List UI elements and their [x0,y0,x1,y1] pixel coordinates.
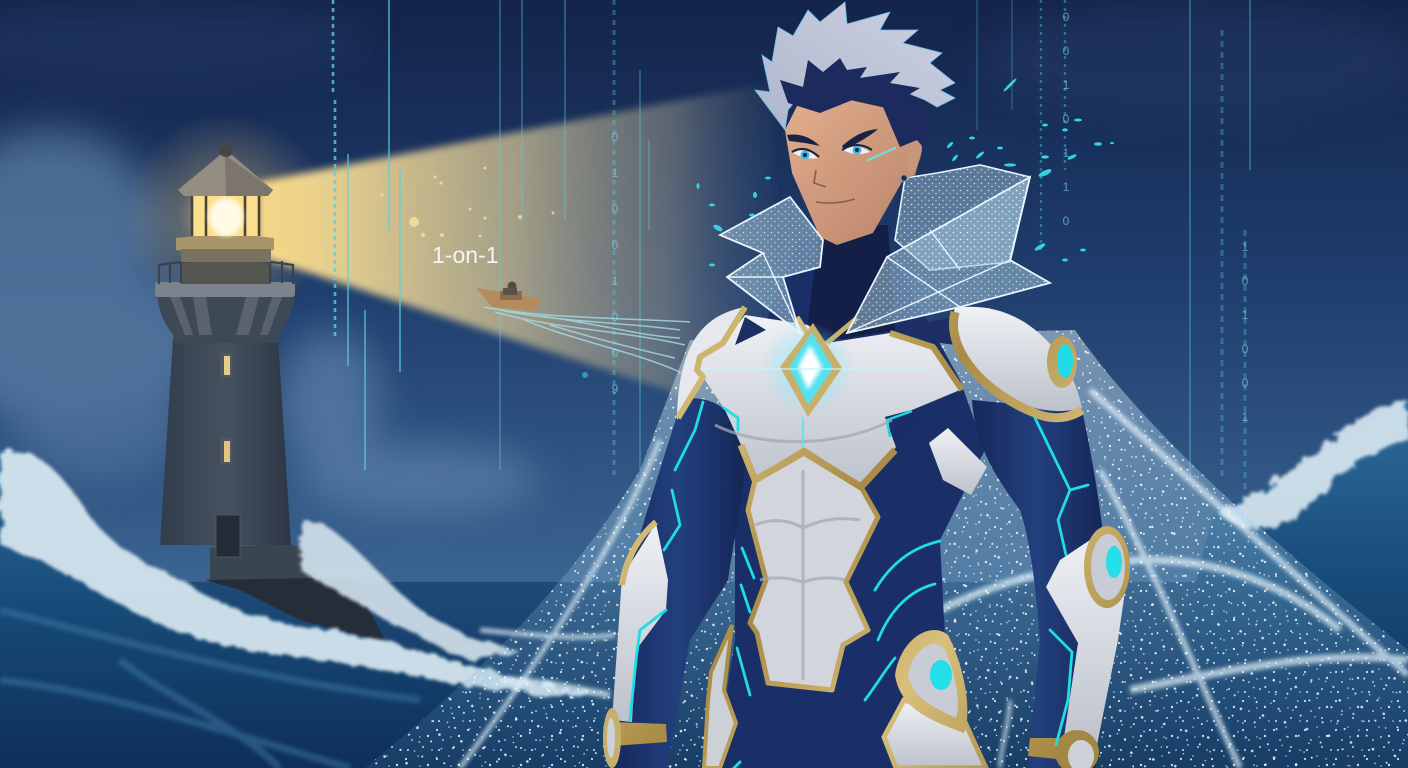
torso [715,235,985,768]
lantern base [176,235,274,253]
front collar right [847,177,1050,333]
lighthouse corbel [157,296,295,343]
boat [476,282,541,311]
ear [905,138,922,176]
cyan circuit lines [630,402,1088,768]
right shoulder plate [952,307,1082,411]
eyes [792,145,872,160]
eyebrows [787,129,878,150]
head [785,100,922,245]
lighthouse [155,136,386,642]
shoulder roundel [1047,336,1077,388]
chest gem [700,322,925,448]
back collar [895,165,1030,270]
beam halo [121,113,331,323]
upper chest navy panels [735,317,956,345]
right elbow roundel [1084,526,1130,608]
binary digits: 0 0 1 0 1 1 0 [1059,10,1073,231]
left bracer [612,523,668,722]
hair dark sweep [780,58,937,147]
cape folds [460,390,1408,768]
neck [805,225,895,345]
left wave [0,449,640,768]
hero [603,2,1130,768]
cape [365,330,1408,768]
lighthouse roof [178,155,273,196]
lighthouse steps [210,544,312,580]
data rain [333,0,1250,490]
sea [0,582,1408,768]
left leg armour [704,625,736,768]
shoulder gold trims [678,307,1082,418]
binary digits: 1 0 1 0 0 1 [1238,240,1252,427]
face glow mark [868,148,895,160]
light beam [258,82,775,425]
abs gold collar [741,445,895,487]
storm clouds [0,0,1408,515]
lighthouse tower [160,338,291,545]
lighthouse door [216,515,240,557]
hip roundel [895,630,967,733]
left cuff [603,708,667,768]
left shoulder plate [677,307,745,420]
right chest panel [885,410,925,447]
lantern room [191,196,259,236]
binary digits: 0 1 0 0 1 0 0 9 [608,130,622,400]
right leg armour [884,700,986,768]
left arm [612,398,745,768]
side armour [929,428,987,495]
nose and mouth [814,170,855,203]
right arm [972,400,1104,768]
lighthouse gallery [155,282,295,297]
right bracer [1046,530,1128,750]
abs plate [748,450,878,690]
lighthouse windows [220,353,232,464]
binary digits [608,10,1252,427]
earring [901,175,907,181]
label: 1-on-1: 1-on-1 [432,242,498,268]
abs lines [715,420,892,680]
right wave [1150,400,1408,768]
hair [755,2,955,130]
lighthouse rock base [205,578,386,642]
boat wake [484,307,690,372]
right cuff [1028,730,1099,768]
front collar left [720,197,823,333]
cyan data particles [582,78,1114,378]
beam sparkles [380,166,554,238]
chest armour [700,315,960,487]
